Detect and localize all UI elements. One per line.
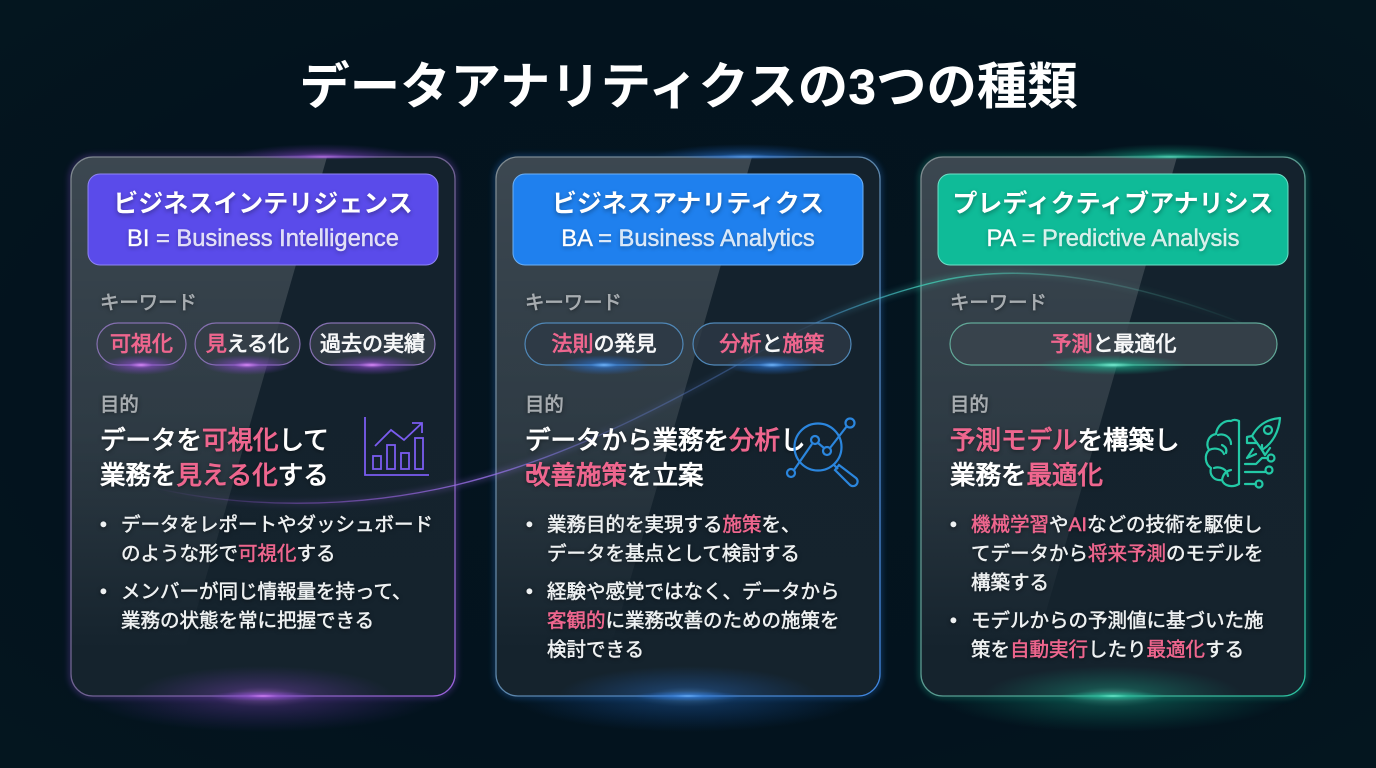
purpose: PA: 業務を最適化 <box>950 462 1103 490</box>
heading: BI: BI = Business Intelligence <box>127 226 399 252</box>
panel: BA card <box>496 144 880 732</box>
purpose: BI: 目的 <box>100 394 139 416</box>
bullets: BI: • <box>100 581 107 603</box>
icon: brain and rocket <box>1204 416 1282 489</box>
background and glass cards <box>66 145 1310 728</box>
bullets: BI: • <box>100 514 107 536</box>
heading: PA: PA = Predictive Analysis <box>986 226 1240 252</box>
bullets: PA: てデータから将来予測のモデルを <box>971 543 1264 565</box>
keywords: PA <box>950 292 1176 356</box>
heading: BI: ビジネスインテリジェンス <box>113 190 413 218</box>
bullets: BI: メンバーが同じ情報量を持って、 <box>121 581 412 603</box>
keywords: PA: 予測と最適化 <box>1050 333 1176 356</box>
heading: PA <box>952 190 1274 254</box>
heading: BA <box>552 190 824 254</box>
bullets: BA: 業務目的を実現する施策を、 <box>547 514 801 536</box>
keywords: BI <box>100 292 425 356</box>
heading: BI <box>113 190 413 255</box>
bullets: BA <box>526 514 840 661</box>
bullets: PA: 構築する <box>971 572 1049 594</box>
bullets: PA <box>950 514 1264 661</box>
bullets: BA: • <box>526 514 533 536</box>
title: データアナリティクスの3つの種類 <box>299 58 1078 115</box>
bullets: PA: 機械学習やAIなどの技術を駆使し <box>971 514 1262 536</box>
keywords: BI: キーワード <box>100 292 197 314</box>
purpose: BI <box>100 394 329 490</box>
purpose: PA: 目的 <box>950 394 989 416</box>
purpose: BI: データを可視化して <box>100 427 329 455</box>
bullets: BI: 業務の状態を常に把握できる <box>121 610 374 632</box>
keywords: BI: 可視化 <box>110 333 173 356</box>
glowing arc <box>150 273 1260 503</box>
purpose: PA: 予測モデルを構築し <box>950 427 1180 455</box>
bullets: PA: • <box>950 514 957 536</box>
keywords: BA: キーワード <box>525 292 622 314</box>
bullets: PA: 策を自動実行したり最適化する <box>971 639 1244 661</box>
bullets: PA: • <box>950 610 957 632</box>
bullets: BA: • <box>526 581 533 603</box>
bullets: BI: データをレポートやダッシュボード <box>121 514 433 536</box>
keywords: BI: 見える化 <box>206 333 289 356</box>
purpose: BA: 改善施策を立案 <box>525 462 704 490</box>
purpose: PA <box>950 394 1180 490</box>
bullets: BA: 検討できる <box>547 639 644 661</box>
icon: bar and line chart <box>364 417 429 476</box>
keywords: PA: キーワード <box>950 292 1047 314</box>
header plates <box>88 174 1288 265</box>
bullets: BA: 客観的に業務改善のための施策を <box>547 610 840 632</box>
bullets: BI: のような形で可視化する <box>121 543 336 565</box>
pills <box>97 323 1277 375</box>
bullets: BA: 経験や感覚ではなく、データから <box>547 581 840 603</box>
keywords: BI: 過去の実績 <box>320 333 425 356</box>
panel: BI card <box>71 144 455 732</box>
heading: BA: ビジネスアナリティクス <box>552 190 824 218</box>
panel: PA card <box>921 144 1305 732</box>
bullets: BI <box>100 514 433 632</box>
keywords: BA: 分析と施策 <box>720 333 824 356</box>
keywords: BA <box>525 292 824 356</box>
heading: PA: プレディクティブアナリシス <box>952 190 1274 218</box>
keywords: BA: 法則の発見 <box>552 333 656 356</box>
purpose: BA: データから業務を分析し <box>525 427 806 455</box>
bullets: BA: データを基点として検討する <box>547 543 800 565</box>
purpose: BA <box>525 394 806 490</box>
purpose: BA: 目的 <box>525 394 564 416</box>
icon: magnifier with data points <box>786 417 859 488</box>
purpose: BI: 業務を見える化する <box>100 462 329 490</box>
bullets: PA: モデルからの予測値に基づいた施 <box>971 610 1264 632</box>
heading: BA: BA = Business Analytics <box>561 226 815 252</box>
